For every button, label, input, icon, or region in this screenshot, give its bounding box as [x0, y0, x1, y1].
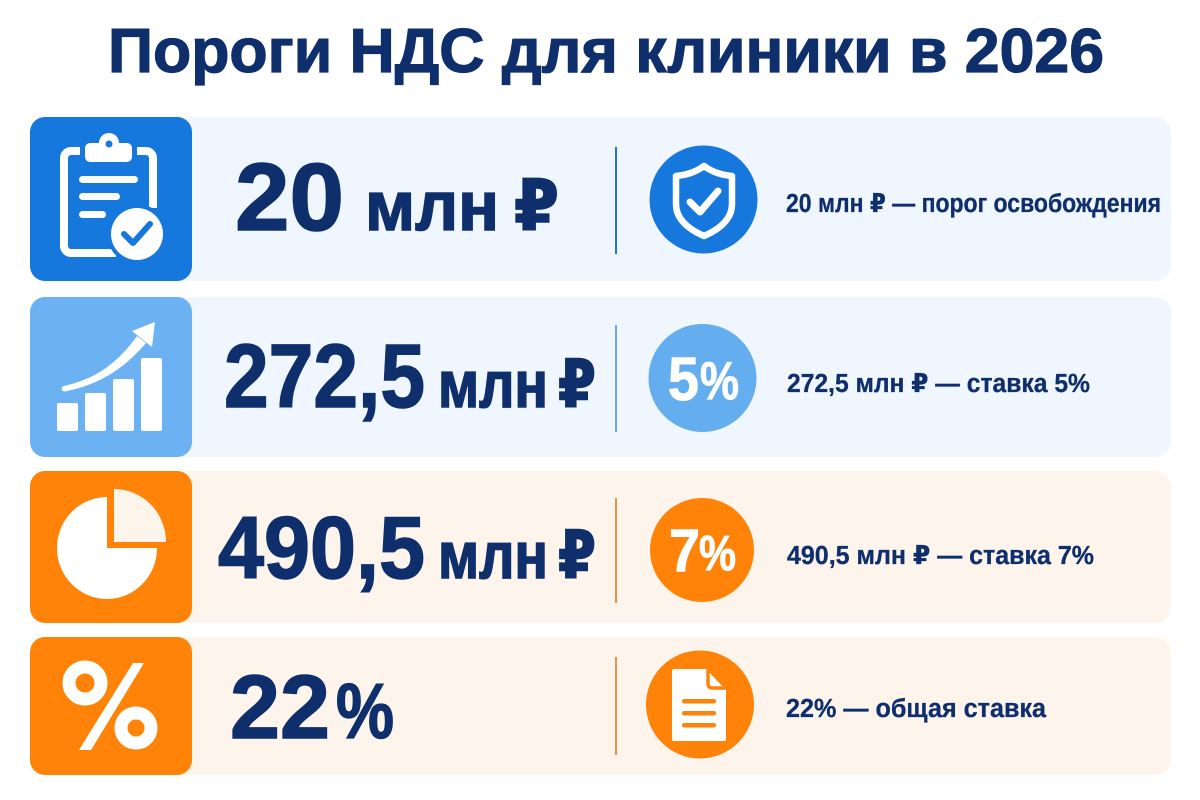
panel: row 4, 22% [30, 637, 1171, 775]
badge: 5%: % [700, 352, 739, 411]
icon: shield check [650, 146, 758, 254]
caption: 20 млн ₽ — порог освобождения [786, 190, 1161, 218]
value: 490,5 млн ₽: млн [438, 518, 548, 592]
value: 20 млн ₽: 20 [235, 144, 344, 251]
caption: 490,5 млн ₽ — ставка 7% [787, 542, 1094, 570]
value: 22% [230, 658, 394, 758]
value: 490,5 млн ₽: ₽ [558, 518, 596, 592]
value: 272,5 млн ₽: ₽ [558, 347, 596, 421]
value: 22%: % [336, 667, 394, 755]
badge: 7% [650, 498, 754, 602]
panel: row 2, 272,5 млн [30, 297, 1171, 457]
value: 490,5 млн ₽ [218, 498, 596, 597]
value: 490,5 млн ₽: 490,5 [218, 498, 425, 597]
value: 20 млн ₽: ₽ [514, 167, 559, 245]
value: 272,5 млн ₽: млн [438, 347, 548, 421]
caption: 22% — общая ставка [786, 695, 1047, 723]
badge: 5%: 5 [668, 345, 699, 413]
title: Пороги НДС для клиники в 2026 [108, 17, 1104, 86]
value: 272,5 млн ₽: 272,5 [224, 327, 425, 427]
icon tile: growth chart [30, 297, 192, 457]
icon: document [646, 650, 754, 758]
value: 20 млн ₽: млн [365, 167, 499, 245]
badge: 7%: 7 [669, 517, 700, 584]
icon tile: pie chart [30, 471, 192, 623]
badge: 7%: % [699, 527, 736, 581]
panel: row 3, 490,5 млн [30, 471, 1171, 623]
icon tile: percent [30, 637, 192, 775]
panel: row 1, 20 млн [30, 117, 1171, 281]
value: 20 млн ₽ [235, 144, 559, 251]
icon tile: clipboard [30, 117, 192, 281]
badge: 5% [648, 324, 756, 432]
value: 272,5 млн ₽ [224, 327, 596, 427]
caption: 272,5 млн ₽ — ставка 5% [787, 370, 1090, 398]
value: 22%: 22 [230, 658, 330, 758]
